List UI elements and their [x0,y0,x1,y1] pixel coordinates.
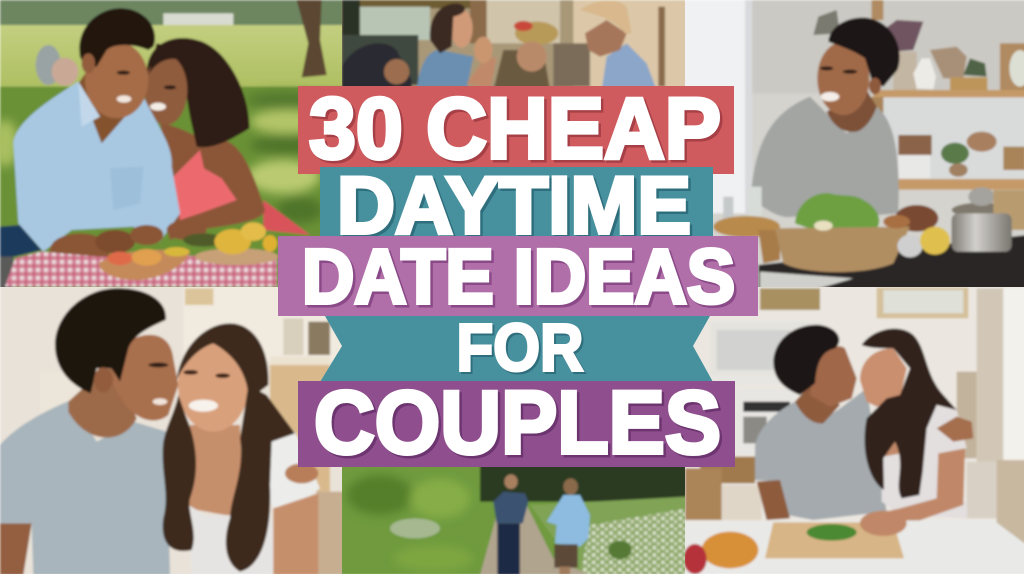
banner: 30 CHEAP: 30 CHEAP [309,81,721,177]
photo: man in kitchen with basket [680,0,1024,290]
banner: FOR ribbon [320,310,713,388]
banner: DAYTIME: DAYTIME [337,161,691,251]
banner: COUPLES: COUPLES [316,374,724,474]
photo: couple cooking at kitchen table [680,285,1024,574]
banner: FOR ribbon: FOR [458,312,586,388]
photo: smiling couple on sofa [0,285,345,574]
banner: DATE IDEAS: DATE IDEAS [302,234,735,320]
banner: COUPLES: COUPLES [314,372,721,472]
photo: couple picnic in park [0,0,345,290]
banner: DATE IDEAS: DATE IDEAS [304,236,738,322]
photo: two men walking on nature path [340,465,687,574]
title: 30 cheap daytime date ideas for couples [278,81,758,474]
photo: friends at outdoor market [340,0,687,90]
banner: DAYTIME: DAYTIME [340,164,694,254]
banner: FOR ribbon: FOR [456,310,584,386]
banner: 30 CHEAP: 30 CHEAP [312,84,724,180]
